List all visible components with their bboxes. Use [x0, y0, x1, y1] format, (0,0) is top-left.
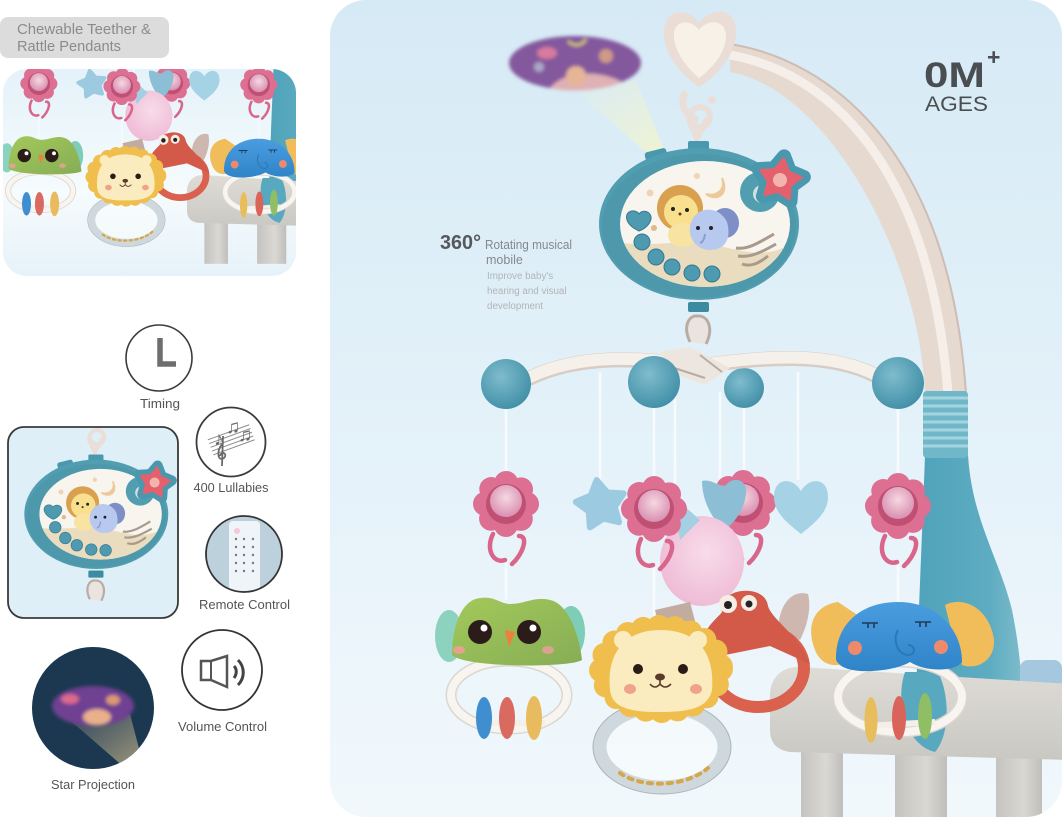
- heading badge: teether pendants: Rattle Pendants: [17, 39, 121, 55]
- callout: 360 rotating musical mobile: development: [487, 301, 543, 312]
- device face: [620, 161, 790, 287]
- ribbed collar: [923, 391, 968, 458]
- elephant teether: [811, 602, 994, 752]
- link above device: [688, 107, 710, 138]
- age badge: +: [987, 44, 1000, 70]
- curved arm: [730, 44, 966, 394]
- star behind flower: [672, 495, 700, 540]
- callout: 360 rotating musical mobile: Improve baby's: [487, 271, 553, 282]
- hanging music box device: [599, 96, 807, 344]
- owl rattle: [435, 598, 585, 740]
- lion rattle: [593, 627, 731, 794]
- heading badge: teether pendants: Chewable Teether &: [17, 22, 151, 38]
- crib rail: [770, 667, 1062, 760]
- moon: [706, 178, 724, 197]
- feature: timing: Timing: [140, 397, 180, 411]
- heading badge: teether pendants: [0, 17, 169, 58]
- back heart: [702, 480, 746, 530]
- crab claw: [778, 593, 809, 640]
- callout: 360 rotating musical mobile: hearing and visual: [487, 286, 567, 297]
- heart clip: [664, 12, 736, 120]
- feature: 400 lullabies: ♫: [226, 417, 240, 438]
- strings: [506, 372, 898, 620]
- device body: [599, 148, 799, 300]
- feature: 400 lullabies: ♪: [214, 429, 224, 450]
- crab teether: [700, 591, 810, 707]
- blue balls on bar: [481, 356, 924, 409]
- age badge: AGES: [925, 92, 988, 116]
- star light button: [740, 172, 780, 212]
- panel: main product scene: [435, 12, 1062, 817]
- control buttons: [626, 211, 720, 282]
- panel: rattle pendants close-up: [3, 69, 296, 276]
- feature: 400 lullabies: [194, 408, 268, 495]
- lower mobile, toys, pole and crib rail: [435, 347, 1062, 817]
- pink flowers: [485, 483, 527, 564]
- crib legs: [801, 745, 1042, 817]
- callout: 360 rotating musical mobile: 360°: [440, 231, 481, 254]
- wave lines: [736, 234, 776, 265]
- feature: remote control: [199, 516, 290, 612]
- callout: 360 rotating musical mobile: Rotating musical: [485, 238, 572, 252]
- pink ball: [660, 516, 744, 606]
- feature: star projection: [32, 647, 154, 792]
- hanging bar: [530, 358, 880, 378]
- blue star: [573, 476, 628, 529]
- feature: remote control: Remote Control: [199, 598, 290, 612]
- link below device: [687, 316, 710, 344]
- lion illustration: [657, 185, 703, 231]
- callout: 360 rotating musical mobile: [440, 231, 572, 312]
- panel: music box close-up: [8, 422, 178, 618]
- age badge: 0M: [924, 56, 985, 95]
- panel: main product background: [330, 0, 1062, 817]
- feature: timing: [126, 325, 192, 411]
- projection light beam: [588, 80, 663, 152]
- feature: star projection: Star Projection: [51, 778, 135, 792]
- blue pole base: [916, 455, 1022, 700]
- back flower: [722, 482, 764, 563]
- crib clamp: [1020, 660, 1062, 684]
- age badge: [925, 51, 1000, 111]
- feature: volume control: Volume Control: [178, 720, 267, 734]
- callout: 360 rotating musical mobile: mobile: [486, 253, 523, 267]
- feature: volume control: [178, 630, 267, 734]
- blue heart right: [774, 481, 828, 534]
- feature: 400 lullabies: ♫: [238, 425, 252, 446]
- elephant illustration: [711, 208, 739, 238]
- back blue ball: [724, 368, 764, 408]
- feature: 400 lullabies: 400 Lullabies: [194, 481, 268, 495]
- projected star image: [509, 36, 641, 90]
